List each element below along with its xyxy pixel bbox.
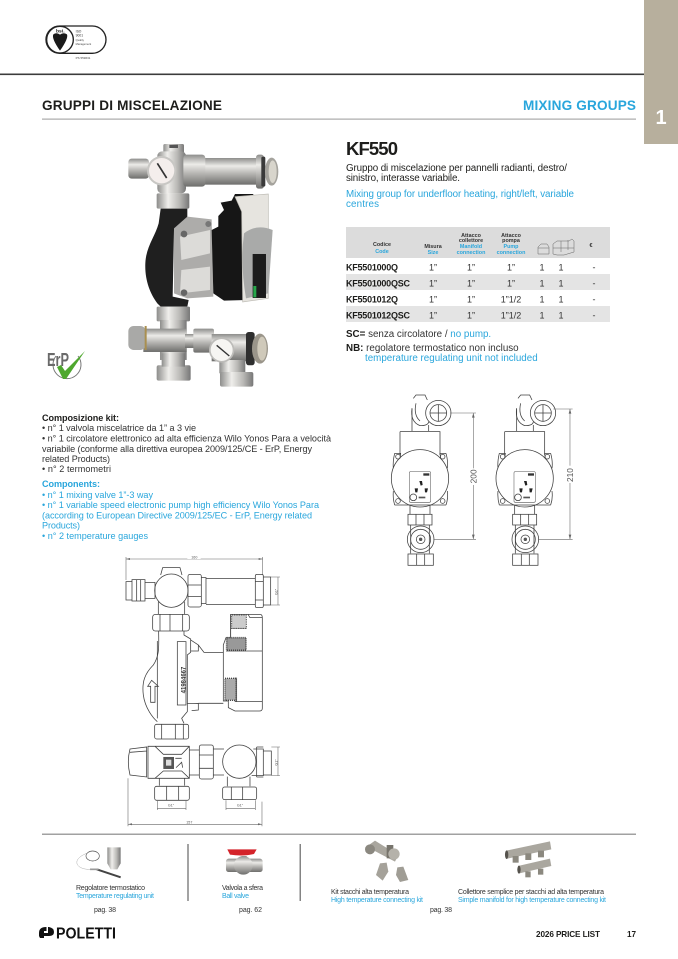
table: product codes — [346, 227, 610, 322]
table: product codes: 1” — [429, 310, 437, 320]
top valve and pipe — [126, 568, 280, 631]
lower mixing valve: G1" — [168, 803, 175, 807]
table: product codes: - — [592, 278, 596, 288]
table header — [346, 227, 610, 258]
table header: connection — [457, 250, 485, 256]
table header: connection — [497, 250, 525, 256]
text block: Composizione kit: Composizione kit: — [42, 413, 119, 423]
top valve and pipe: G1" — [275, 588, 279, 595]
table: product codes: 1 — [539, 262, 545, 272]
icon: single box — [538, 244, 549, 254]
table: product codes: 1”1/2 — [501, 294, 521, 304]
text block: Components: • n° 1 mixing valve 1”-3 way — [42, 490, 153, 500]
text block: Composizione kit: • n° 1 valvola miscelatrice da 1” a 3 vie — [42, 423, 196, 433]
icon: fittings — [365, 841, 408, 882]
product title: KF550 — [346, 138, 398, 159]
lower mixing valve — [128, 724, 189, 810]
icon: box pack — [553, 239, 574, 255]
icon: manifolds — [505, 841, 551, 877]
icon: ball valve — [226, 849, 263, 875]
text block: Components: Products) — [42, 520, 80, 530]
table: product codes: 1” — [467, 278, 475, 288]
front view technical drawings — [391, 395, 575, 565]
text block: Composizione kit: • n° 2 termometri — [42, 464, 111, 474]
table: product codes: - — [592, 294, 596, 304]
text block: Components: (according to European Directive 2009/125/EC - ErP, Energy related — [42, 510, 312, 520]
table header: Codice — [373, 242, 391, 248]
table: product codes: 1 — [558, 310, 564, 320]
table: product codes: 1” — [429, 278, 437, 288]
table header: € — [590, 243, 592, 249]
side tab with chapter number: 1 — [655, 107, 667, 129]
footer logo: Poletti: POLETTI — [56, 926, 116, 942]
product description English: centres — [346, 199, 379, 210]
accessory: temperature regulating unit — [76, 847, 154, 914]
accessory: simple manifold: Collettore semplice per stacchi ad alta temperatura — [458, 889, 604, 896]
certification logo: Quality — [76, 38, 85, 42]
icon: ErP check badge — [47, 350, 85, 379]
table header: Attacco — [501, 233, 522, 239]
table header: Size — [428, 250, 438, 256]
top rule — [0, 74, 644, 75]
table: product codes: 1” — [507, 262, 515, 272]
table: product codes: 1 — [539, 278, 545, 288]
icon: ErP check badge: ErP — [47, 350, 69, 370]
accessory: ball valve: pag. 62 — [239, 907, 262, 914]
table rows — [346, 274, 610, 290]
table: product codes: 1 — [539, 310, 545, 320]
drawing: front view 210 — [496, 395, 556, 565]
dimension: 210 — [538, 409, 575, 539]
accessory: temperature regulating unit: pag. 38 — [94, 907, 116, 914]
accessory: high temperature connecting kit: pag. 38 — [430, 907, 452, 914]
table: product codes: 1 — [558, 262, 564, 272]
dimension: top width 160: 160 — [191, 555, 197, 559]
heading rule — [42, 119, 636, 120]
certification logo: 9001 — [76, 34, 83, 38]
table: product codes: - — [592, 262, 596, 272]
accessory: high temperature connecting kit — [331, 841, 452, 914]
text block: Composizione kit: • n° 1 circolatore elettronico ad alta efficienza Wilo Yonos Para a velocità — [42, 434, 332, 444]
table header: collettore — [459, 238, 483, 244]
accessory: ball valve — [222, 849, 263, 914]
text block: Components: • n° 1 variable speed electronic pump high efficiency Wilo Yonos Para — [42, 500, 320, 510]
table: product codes: KF5501000QSC — [346, 278, 410, 288]
note: NB — [346, 343, 538, 364]
table: product codes: 1” — [507, 278, 515, 288]
chrome pump housing — [174, 217, 213, 298]
text block: Composizione kit: related Products) — [42, 454, 110, 464]
top outlet pipe — [197, 155, 278, 189]
heading: Italian section title: GRUPPI DI MISCELAZIONE — [42, 98, 222, 113]
pump control black housing — [212, 194, 253, 301]
table: product codes: 1” — [467, 262, 475, 272]
product description English: Mixing group for underfloor heating, right/left, variable — [346, 189, 575, 200]
accessory: ball valve: Ball valve — [222, 893, 249, 900]
table header: pompa — [502, 238, 521, 244]
text block: Components — [42, 479, 320, 541]
text block: Composizione kit — [42, 413, 332, 474]
product description English — [346, 189, 575, 210]
divider — [187, 844, 189, 901]
heading: English section title: MIXING GROUPS — [523, 98, 636, 113]
certification logo — [46, 26, 106, 60]
accessory: simple manifold — [458, 841, 606, 904]
certification logo: ISO — [76, 29, 82, 33]
text block: Components: Components: — [42, 479, 100, 489]
dimension: top width 160 — [126, 555, 263, 580]
table: product codes: KF5501012QSC — [346, 310, 410, 320]
table header: Code — [375, 249, 389, 255]
product description Italian — [346, 163, 567, 184]
certification logo: Management — [76, 42, 91, 46]
icon: thermostat — [77, 847, 121, 877]
note: NB: NB: regolatore termostatico non incluso — [346, 343, 519, 354]
accessory: high temperature connecting kit: High temperature connecting kit — [331, 897, 423, 904]
table: product codes: 1” — [467, 310, 475, 320]
table: product codes: 1”1/2 — [501, 310, 521, 320]
dimension: 200: 200 — [469, 469, 479, 483]
side tab with chapter number — [644, 0, 678, 144]
dimension: 210: 210 — [565, 468, 575, 482]
dimension: 200 — [433, 413, 479, 539]
accessories rule — [42, 834, 636, 835]
lower mixing valve — [128, 307, 191, 381]
table: product codes: 1 — [558, 278, 564, 288]
table: product codes: 1 — [558, 294, 564, 304]
certification logo: PS 559631 — [76, 56, 91, 60]
dimension: bottom width 157 — [128, 778, 262, 826]
dimension: bottom width 157: 157 — [186, 821, 192, 825]
table header: Manifold — [460, 244, 482, 250]
text block: Composizione kit: variabile (conforme alla direttiva europea 2009/125/CE - ErP, Energy — [42, 444, 312, 454]
table header: Pump — [504, 244, 519, 250]
lower thermometer branch: G1" — [237, 803, 244, 807]
top valve body — [128, 144, 205, 209]
accessory: ball valve: Valvola a sfera — [222, 885, 263, 892]
table: product codes: 1” — [429, 262, 437, 272]
drawing: front view 200 — [391, 395, 451, 565]
pump volute black — [145, 209, 189, 307]
note: SC: SC= senza circolatore / no pump. — [346, 329, 491, 340]
footer: price list label: 2026 PRICE LIST — [536, 930, 600, 939]
certification logo: bsi. — [56, 29, 65, 35]
accessory: simple manifold: Simple manifold for high temperature connecting kit — [458, 897, 606, 904]
text block: Components: • n° 2 temperature gauges — [42, 531, 148, 541]
pump body outline — [143, 631, 223, 723]
table: product codes: KF5501000Q — [346, 262, 398, 272]
note: NB: temperature regulating unit not included — [365, 353, 538, 364]
pump control side — [223, 614, 262, 711]
lower thermometer branch — [189, 745, 280, 810]
table header: Attacco — [461, 233, 482, 239]
accessory: high temperature connecting kit: Kit stacchi alta temperatura — [331, 889, 409, 896]
side view technical drawing — [126, 555, 280, 826]
divider — [300, 844, 301, 901]
accessory: temperature regulating unit: Regolatore termostatico — [76, 885, 145, 892]
table: product codes: KF5501012Q — [346, 294, 398, 304]
table: product codes: 1” — [467, 294, 475, 304]
footer: page number: 17 — [627, 930, 637, 939]
lower thermometer branch: G1" — [275, 759, 279, 766]
pump body outline: 41984667 — [181, 666, 187, 693]
table header: Misura — [424, 244, 443, 250]
accessory: temperature regulating unit: Temperature regulating unit — [76, 893, 154, 900]
lower thermometer branch — [185, 329, 268, 387]
product photo: mixing group with pump — [128, 144, 278, 387]
white control module — [235, 194, 268, 302]
product description Italian: Gruppo di miscelazione per pannelli radianti, destro/ — [346, 163, 567, 174]
table: product codes: 1 — [539, 294, 545, 304]
table: product codes: 1” — [429, 294, 437, 304]
product description Italian: sinistro, interasse variabile. — [346, 173, 460, 184]
table: product codes: - — [592, 310, 596, 320]
